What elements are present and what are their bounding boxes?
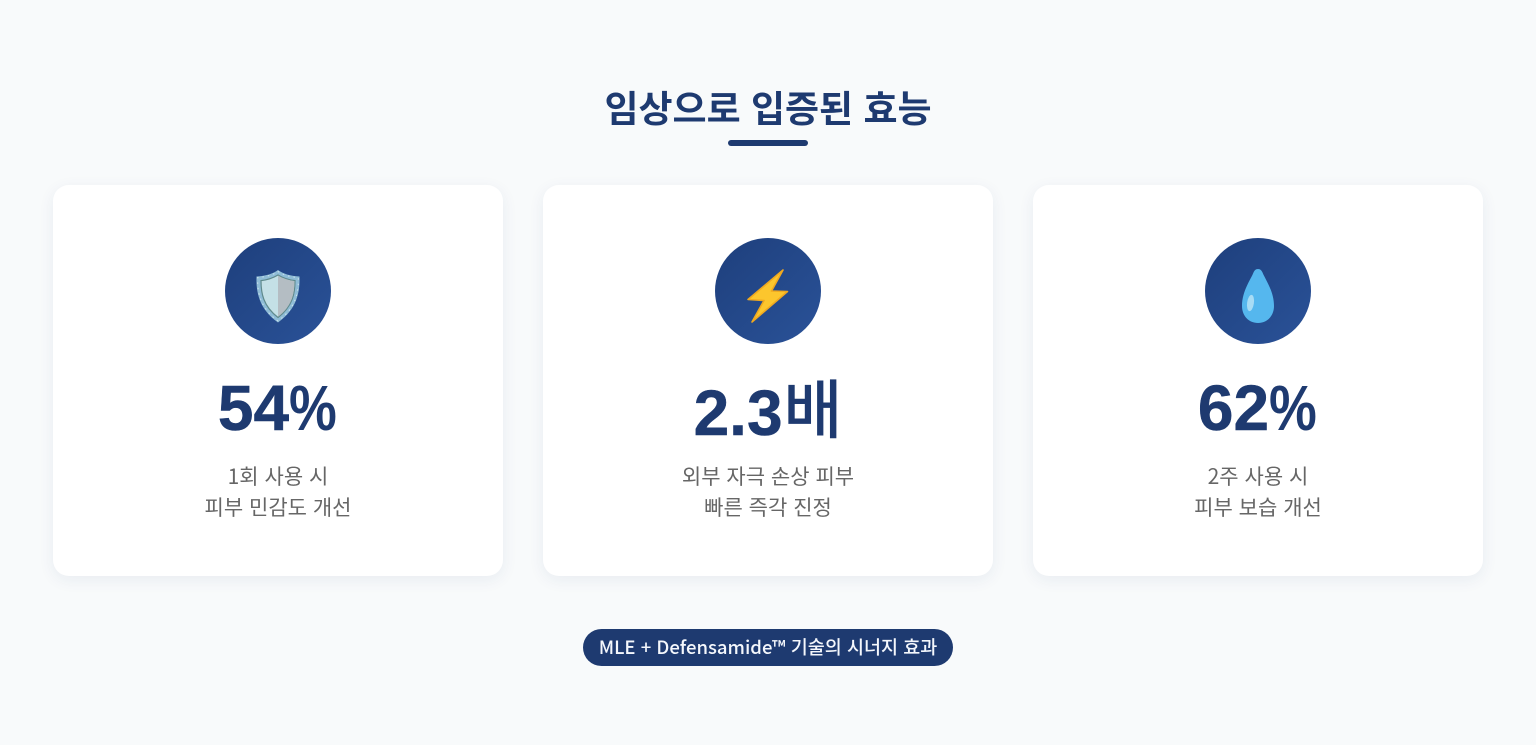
panel: 피부 보습 개선 — [1033, 185, 1483, 576]
panel: 빠른 즉각 진정 — [543, 185, 993, 576]
icon: water drop — [1205, 238, 1311, 344]
description — [204, 461, 352, 522]
statistic: 54% — [218, 372, 337, 444]
statistic: 54%: 54 — [218, 372, 289, 444]
description: 2주 사용 시 — [1208, 461, 1308, 491]
description: 외부 자극 손상 피부 — [682, 461, 854, 491]
description: 피부 보습 개선 — [1194, 492, 1322, 522]
statistic: 2.3배: 2.3배 — [694, 360, 842, 452]
badge: synergy — [583, 629, 953, 666]
icon: shield — [225, 238, 331, 344]
panel: 피부 민감도 개선 — [53, 185, 503, 576]
badge: synergy: MLE + Defensamide™ 기술의 시너지 효과 — [599, 634, 937, 660]
statistic: 54%: % — [289, 372, 337, 444]
description — [1194, 461, 1322, 522]
statistic: 62%: % — [1269, 372, 1317, 444]
description: 피부 민감도 개선 — [204, 492, 352, 522]
title underline — [728, 140, 808, 146]
description: 1회 사용 시 — [228, 461, 328, 491]
description — [682, 461, 854, 522]
icon: lightning bolt — [715, 238, 821, 344]
description: 빠른 즉각 진정 — [704, 492, 832, 522]
statistic: 62% — [1198, 372, 1317, 444]
title: 임상으로 입증된 효능 — [604, 79, 932, 133]
statistic: 62%: 62 — [1198, 372, 1269, 444]
